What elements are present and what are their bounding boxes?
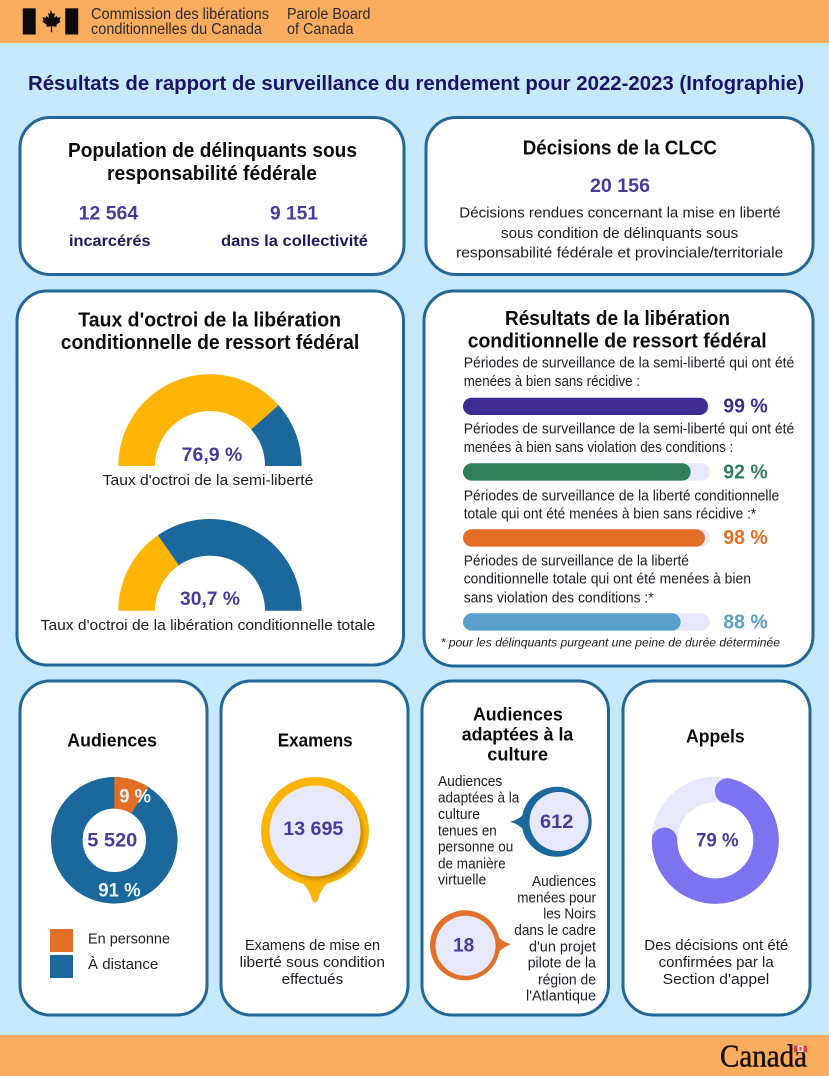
- gauge: full parole: 30,7 %: [180, 589, 240, 610]
- stat: community: dans la collectivité: [221, 233, 368, 250]
- heading: outcomes: [468, 308, 767, 352]
- organization name: Parole Board: [287, 6, 370, 23]
- panel: decisions: [426, 118, 813, 274]
- organization name: [91, 6, 370, 38]
- reviews description: [240, 938, 385, 988]
- heading: culturally responsive hearings: culture: [487, 744, 548, 765]
- outcome 4: [463, 553, 768, 634]
- icon: map pin with reviews count: [261, 777, 369, 902]
- donut chart: hearings: 9 %: [119, 787, 151, 808]
- heading: culturally responsive hearings: Audiences: [473, 704, 563, 725]
- icon: Canada flag signature: [23, 8, 78, 35]
- heading: population: responsabilité fédérale: [107, 163, 317, 185]
- heading: population: [68, 140, 357, 185]
- outcome 3: totale qui ont été menées à bien sans récidive :*: [464, 506, 757, 522]
- outcome 4: Périodes de surveillance de la liberté: [464, 553, 689, 569]
- gauge: day parole: [118, 374, 302, 466]
- decisions description: responsabilité fédérale et provinciale/territoriale: [456, 246, 783, 262]
- panel: appeals: [623, 681, 810, 1015]
- description: 18 hearings: dans le cadre: [514, 923, 596, 939]
- legend: hearings: [50, 929, 170, 978]
- panel: grant rates: [17, 291, 404, 665]
- description: 18 hearings: pilote de la: [528, 956, 597, 972]
- outcome 2: Périodes de surveillance de la semi-liberté qui ont été: [464, 421, 794, 437]
- footer band: [0, 1035, 829, 1076]
- heading: grant rates: [61, 310, 359, 354]
- description: 612 hearings: tenues en: [438, 823, 497, 839]
- donut chart: hearings: [67, 777, 162, 902]
- stat: decisions: 20 156: [590, 176, 650, 197]
- donut chart: hearings: 91 %: [98, 881, 141, 902]
- outcome 1: Périodes de surveillance de la semi-liberté qui ont été: [464, 355, 794, 371]
- outcome 4: sans violation des conditions :*: [464, 590, 654, 606]
- bubble: 18: [430, 910, 511, 980]
- reviews description: Examens de mise en: [245, 938, 380, 954]
- outcome 3: 98 %: [723, 527, 768, 549]
- description: 18 hearings: [514, 874, 597, 1004]
- decisions description: sous condition de délinquants sous: [501, 226, 738, 242]
- panel: parole outcomes: [424, 291, 813, 666]
- heading: grant rates: conditionnelle de ressort fédéral: [61, 332, 359, 354]
- footnote: * pour les délinquants purgeant une peine de durée déterminée: [441, 636, 780, 650]
- outcome 3: [463, 488, 779, 549]
- description: 612 hearings: virtuelle: [438, 872, 486, 888]
- description: 612 hearings: culture: [438, 807, 480, 823]
- description: 18 hearings: d'un projet: [529, 939, 596, 955]
- title: Résultats de rapport de surveillance du rendement pour 2022-2023 (Infographie): [28, 73, 804, 95]
- heading: outcomes: conditionnelle de ressort fédéral: [468, 330, 767, 352]
- description: 18 hearings: menées pour: [517, 890, 596, 906]
- appeals description: confirmées par la: [659, 955, 775, 971]
- icon: map pin with reviews count: 13 695: [283, 819, 344, 840]
- gauge label: full parole: Taux d'octroi de la libération conditionnelle totale: [41, 618, 375, 634]
- stat: incarcerated: 12 564: [79, 204, 139, 224]
- description: 612 hearings: personne ou: [438, 840, 513, 856]
- outcome 1: 99 %: [723, 396, 768, 418]
- heading: appeals: Appels: [686, 725, 745, 746]
- description: 612 hearings: adaptées à la: [438, 790, 520, 806]
- organization name: conditionnelles du Canada: [91, 21, 262, 38]
- panel: hearings: [20, 681, 207, 1015]
- reviews description: liberté sous condition: [240, 955, 385, 971]
- donut chart: appeals: [664, 790, 766, 891]
- outcome 2: 92 %: [723, 462, 768, 484]
- heading: culturally responsive hearings: [462, 704, 574, 765]
- bubble: 612: 612: [540, 812, 573, 833]
- description: 612 hearings: [438, 774, 520, 888]
- panel: culturally responsive hearings: [422, 681, 608, 1015]
- reviews description: effectués: [282, 972, 343, 988]
- organization name: of Canada: [287, 21, 354, 38]
- description: 612 hearings: Audiences: [438, 774, 502, 790]
- appeals description: [644, 938, 788, 988]
- outcome 2: [463, 421, 794, 484]
- outcome 3: Périodes de surveillance de la liberté conditionnelle: [464, 488, 779, 504]
- gauge: full parole: [118, 519, 302, 611]
- Canada wordmark: Canada: [720, 1038, 807, 1074]
- legend: hearings: En personne: [88, 931, 170, 947]
- heading: outcomes: Résultats de la libération: [505, 308, 730, 330]
- decisions description: Décisions rendues concernant la mise en liberté: [459, 206, 781, 222]
- organization name: Commission des libérations: [91, 6, 269, 23]
- stat: incarcerated: incarcérés: [69, 233, 151, 250]
- description: 18 hearings: région de: [538, 972, 596, 988]
- outcome 2: menées à bien sans violation des conditions :: [464, 440, 733, 456]
- gauge label: day parole: Taux d'octroi de la semi-liberté: [103, 473, 313, 489]
- donut chart: hearings: 5 520: [87, 831, 137, 852]
- outcome 1: [463, 355, 794, 418]
- gauge: day parole: 76,9 %: [182, 445, 242, 466]
- appeals description: Des décisions ont été: [644, 938, 788, 954]
- outcome 4: conditionnelle totale qui ont été menées à bien: [464, 572, 751, 588]
- panel: reviews: [221, 681, 408, 1015]
- stat: community: 9 151: [270, 204, 318, 224]
- panel: population: [20, 118, 404, 274]
- heading: hearings: Audiences: [67, 730, 157, 751]
- legend: hearings: À distance: [88, 956, 158, 973]
- description: 18 hearings: l'Atlantique: [526, 988, 596, 1004]
- heading: decisions: Décisions de la CLCC: [523, 137, 717, 159]
- description: 612 hearings: de manière: [438, 856, 506, 872]
- header band: [0, 0, 829, 43]
- outcome 4: 88 %: [723, 612, 768, 634]
- description: 18 hearings: Audiences: [532, 874, 596, 890]
- decisions description: [456, 206, 783, 262]
- heading: grant rates: Taux d'octroi de la libération: [78, 310, 341, 332]
- description: 18 hearings: les Noirs: [543, 906, 596, 922]
- bubble: 18: 18: [453, 936, 474, 957]
- donut chart: appeals: 79 %: [696, 831, 739, 852]
- appeals description: Section d'appel: [663, 972, 769, 988]
- heading: reviews: Examens: [278, 730, 353, 751]
- heading: population: Population de délinquants sous: [68, 140, 357, 162]
- heading: culturally responsive hearings: adaptées à la: [462, 724, 574, 745]
- bubble: 612: [510, 787, 592, 857]
- outcome 1: menées à bien sans récidive :: [464, 374, 640, 390]
- stat: incarcerated: [69, 204, 151, 250]
- stat: community: [221, 204, 368, 250]
